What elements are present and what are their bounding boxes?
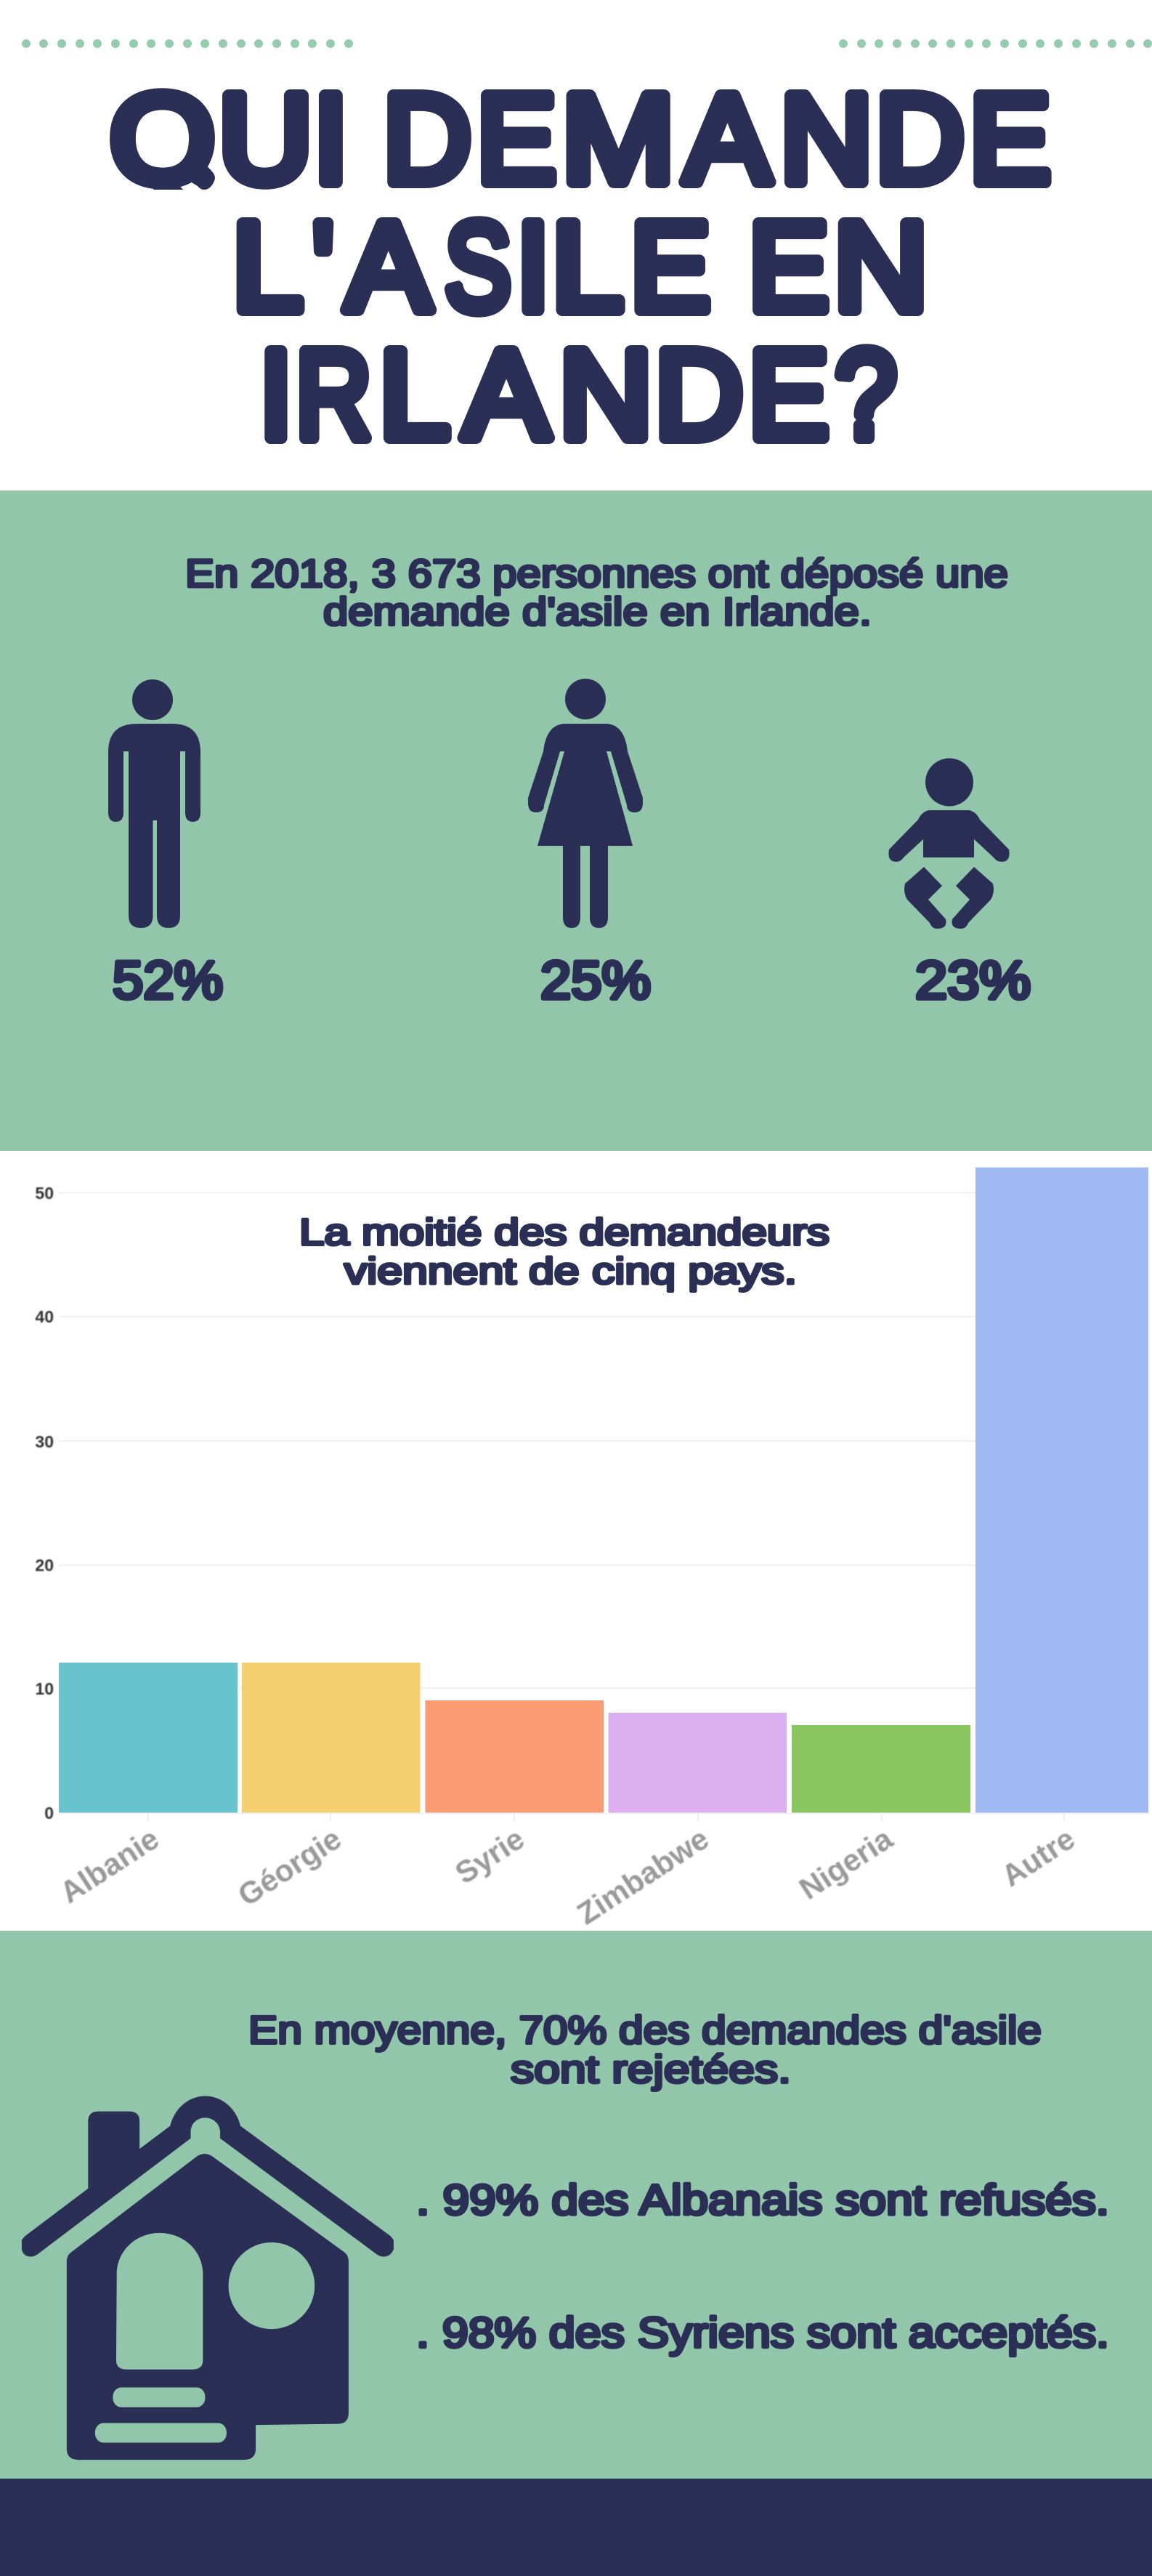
title: ' xyxy=(312,196,334,337)
title: D xyxy=(655,324,743,465)
x axis labels: Nigeria xyxy=(793,1821,899,1906)
heading: countries xyxy=(299,1211,829,1292)
y axis labels: 50 xyxy=(35,1184,54,1203)
x axis labels: Syrie xyxy=(449,1821,530,1891)
x axis labels: Autre xyxy=(995,1821,1081,1893)
heading: countries: La moitié des demandeurs xyxy=(299,1211,829,1253)
x axis labels: Zimbabwe xyxy=(571,1821,715,1931)
title: S xyxy=(445,196,511,337)
heading: applicants xyxy=(185,552,1008,634)
decorative dots right xyxy=(839,39,1152,48)
icon: man xyxy=(108,679,200,928)
icon: baby xyxy=(888,759,1010,929)
title: E xyxy=(749,196,829,337)
x axis labels: Albanie xyxy=(54,1821,165,1910)
heading: applicants: demande d'asile en Irlande. xyxy=(323,590,872,634)
title: E xyxy=(477,68,556,209)
title: N xyxy=(780,68,873,209)
title: L xyxy=(379,324,450,465)
title: A xyxy=(463,324,549,465)
title: E xyxy=(970,68,1051,209)
stat: men 52%: 52% xyxy=(113,951,223,1010)
heading: rejections: En moyenne, 70% des demandes d'asile xyxy=(248,2008,1042,2052)
y axis labels: 0 xyxy=(44,1804,54,1822)
title: I xyxy=(259,324,293,465)
fact: Albanians: . 99% des Albanais sont refusés. xyxy=(416,2177,1109,2224)
title: N xyxy=(559,324,652,465)
title: L xyxy=(552,196,623,337)
title: L xyxy=(232,196,303,337)
footer band xyxy=(0,2479,1152,2576)
x axis labels xyxy=(54,1821,1081,1931)
y axis labels: 40 xyxy=(35,1307,54,1326)
icon: house xyxy=(22,2096,394,2460)
bars xyxy=(59,1167,1148,1812)
heading: rejections xyxy=(248,2008,1042,2091)
fact: Syrians: . 98% des Syriens sont acceptés. xyxy=(416,2309,1109,2357)
stat: women 25%: 25% xyxy=(540,951,651,1010)
title: I xyxy=(516,196,550,337)
title: D xyxy=(384,68,471,209)
header xyxy=(22,39,1152,465)
title xyxy=(109,68,1051,465)
y axis labels: 30 xyxy=(35,1432,54,1451)
title: Q xyxy=(110,68,215,209)
title: N xyxy=(834,196,928,337)
panel: bar chart xyxy=(0,1151,1152,1931)
y axis labels: 10 xyxy=(35,1679,54,1698)
y axis labels: 20 xyxy=(35,1556,54,1575)
panel: rejection rates xyxy=(0,1931,1152,2479)
chart gridlines xyxy=(59,1193,1148,1814)
axis ticks xyxy=(148,1814,1064,1821)
title: U xyxy=(219,68,312,209)
title: ? xyxy=(835,324,896,465)
stat: children 23%: 23% xyxy=(915,951,1031,1010)
title: M xyxy=(561,68,675,209)
title: E xyxy=(749,324,829,465)
icon: woman xyxy=(528,679,643,928)
title: A xyxy=(684,68,771,209)
heading: countries: viennent de cinq pays. xyxy=(344,1250,797,1292)
heading: rejections: sont rejetées. xyxy=(511,2048,791,2091)
title: I xyxy=(314,68,348,209)
x axis labels: Géorgie xyxy=(232,1821,347,1913)
panel: demographics xyxy=(0,490,1152,1151)
title: R xyxy=(296,324,372,465)
decorative dots left xyxy=(22,39,353,48)
heading: applicants: En 2018, 3 673 personnes ont déposé une xyxy=(185,552,1008,596)
title: A xyxy=(346,196,431,337)
y axis labels xyxy=(35,1184,54,1822)
title: E xyxy=(630,196,710,337)
title: D xyxy=(875,68,965,209)
